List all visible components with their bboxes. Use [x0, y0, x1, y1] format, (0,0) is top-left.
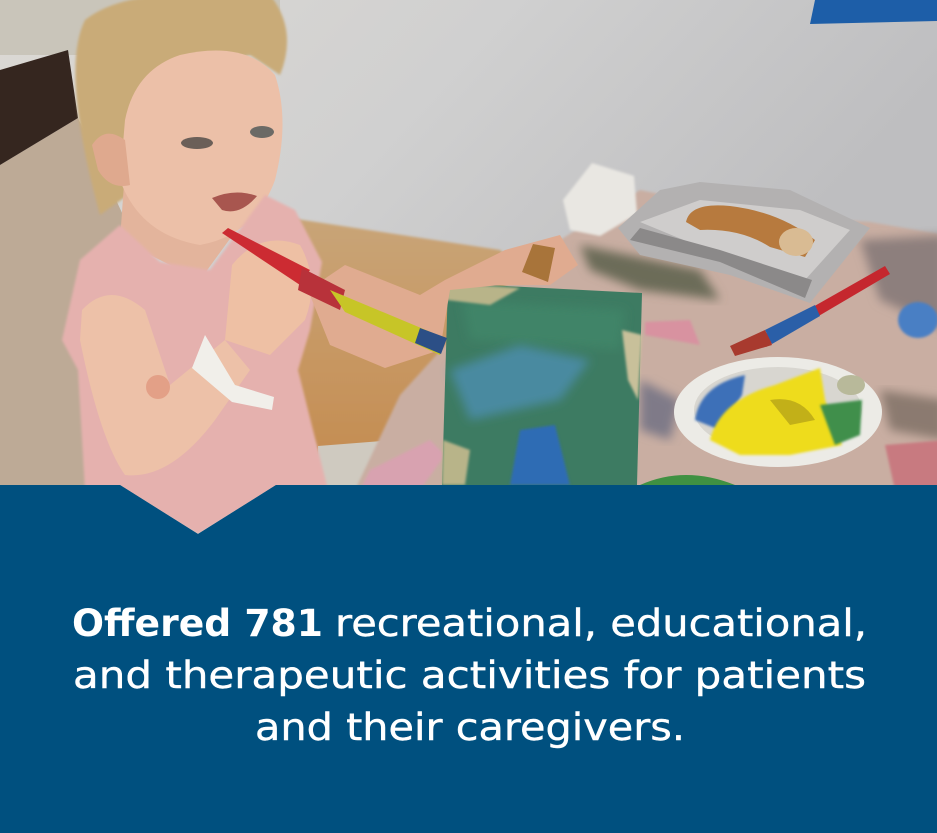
painting hand: [225, 240, 311, 355]
neck: [121, 189, 230, 270]
right arm: [308, 235, 578, 368]
caption text: [72, 602, 867, 749]
eyes and mouth: [181, 137, 213, 149]
photo base colour: [120, 442, 318, 534]
girl: [62, 0, 578, 534]
photo background: wall: [0, 0, 937, 238]
table: [355, 190, 937, 490]
hair: [75, 0, 287, 215]
photo background: floor: [296, 218, 508, 454]
left arm: [80, 295, 250, 475]
held pretzel: [522, 244, 555, 282]
foil wrap with pretzel: [618, 182, 870, 303]
caption line 1 bold lead: Offered 781: [72, 602, 323, 645]
caption line 1 remainder: recreational, educational,: [335, 602, 867, 645]
green painted canvas: [442, 283, 642, 485]
wristband: [192, 335, 274, 410]
paintbrush in hand: [222, 228, 447, 355]
caption line 2: and therapeutic activities for patients: [73, 654, 866, 697]
paper napkin: [563, 163, 637, 236]
blue text panel: [0, 485, 937, 833]
caption line 3: and their caregivers.: [255, 706, 685, 749]
paint palette plate: [674, 357, 882, 467]
pink shirt: [62, 195, 328, 534]
photo: girl painting at a table: [0, 0, 937, 540]
blue fabric top right: [810, 0, 937, 24]
face: [120, 50, 282, 245]
chair: [0, 50, 130, 485]
paintbrush on table: [730, 266, 890, 356]
